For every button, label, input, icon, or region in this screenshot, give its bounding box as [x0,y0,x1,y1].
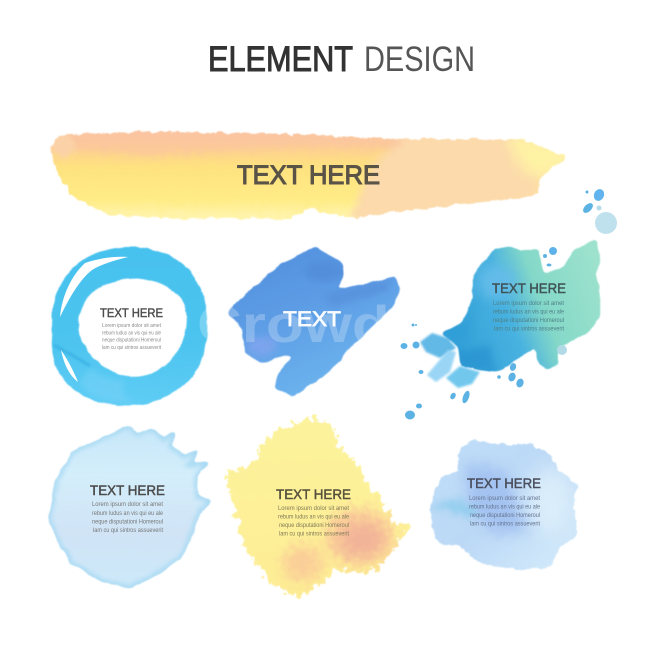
panel: blue brush stroke [197,247,407,397]
ring text: Lorem ipsum dolor sit amet [102,323,161,329]
teal text: Lorem ipsum dolor sit amet [493,300,564,307]
yellow splash text [276,486,351,538]
heading: brush: TEXT [283,308,341,331]
pale splash text [90,482,165,534]
pale splash text: lam cu qui sintros assueverit [93,527,163,534]
blot text: neque disputationi Homeroul [470,512,540,519]
yellow splash text: Lorem ipsum dolor sit amet [278,505,349,512]
pale splash text: TEXT HERE [90,482,165,498]
yellow splash text: rebum ludus an vis qui eu ale [278,514,349,520]
infographic canvas [48,46,617,600]
blot text: rebum ludus an vis qui eu ale [469,504,540,510]
teal text [492,280,566,332]
yellow splash text: neque disputationi Homeroul [279,522,349,529]
blot text: TEXT HERE [467,475,541,491]
ring text: lam cu qui sintros assueverit [102,345,161,351]
ring text: rebum ludus an vis qui eu ale [102,330,161,336]
splash droplets [400,187,617,420]
title: ELEMENT [208,40,353,79]
heading: banner: TEXT HERE [237,160,380,190]
pale splash text: rebum ludus an vis qui eu ale [92,510,163,517]
pale splash text: Lorem ipsum dolor sit amet [92,501,163,508]
teal text: lam cu qui sintros assueverit [494,326,564,332]
blot text: lam cu qui sintros assueverit [470,520,540,528]
splash strands lower left [420,333,456,358]
panel: yellow-orange brush banner [50,130,566,221]
panel: periwinkle blot [429,438,578,571]
blot text: Lorem ipsum dolor sit amet [469,495,540,502]
watermark: Crowdl [197,296,407,354]
ring text: TEXT HERE [100,306,163,320]
pale splash text: neque disputationi Homeroul [92,518,163,526]
yellow splash text: TEXT HERE [276,486,351,502]
teal text: TEXT HERE [492,280,566,296]
ring text [100,306,163,351]
teal text: rebum ludus an vis qui eu ale [493,308,564,316]
yellow splash text: lam cu qui sintros assueverit [279,530,349,538]
title [208,40,475,79]
teal text: neque disputationi Homeroul [493,317,564,324]
title: DESIGN [364,40,475,79]
white slits in ring [60,257,128,317]
panel: teal splash [400,187,617,420]
ring text: neque disputationi Homeroul [102,338,161,344]
panel: yellow splash [224,414,412,600]
panel: blue ring [51,247,207,405]
panel: pale blue splash [50,427,210,587]
blot text [467,475,541,528]
